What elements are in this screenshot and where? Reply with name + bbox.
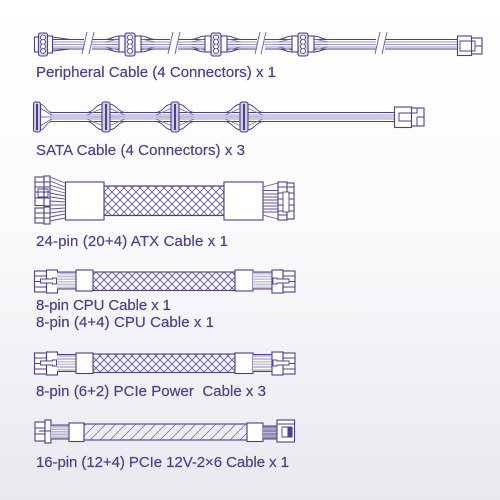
- cable: 8-pin CPU: [34, 270, 295, 293]
- cable: 24-pin ATX: [35, 176, 294, 224]
- label: 16-pin 12V-2x6: 16-pin (12+4) PCIe 12V-2×6 Cable x 1: [36, 454, 289, 471]
- cable: 8-pin PCIe: [34, 352, 295, 375]
- label: 8-pin CPU: 8-pin CPU Cable x 1: [36, 297, 171, 314]
- cable: 16-pin 12V-2x6: [35, 420, 294, 443]
- label: peripheral: Peripheral Cable (4 Connectors) x 1: [36, 64, 276, 81]
- label: 8-pin 4+4 CPU: 8-pin (4+4) CPU Cable x 1: [36, 314, 214, 331]
- label: SATA: SATA Cable (4 Connectors) x 3: [36, 142, 245, 159]
- label: 24-pin ATX: 24-pin (20+4) ATX Cable x 1: [36, 233, 228, 250]
- cable: SATA: [34, 102, 424, 132]
- cable: peripheral: [34, 32, 482, 56]
- label: 8-pin PCIe: 8-pin (6+2) PCIe Power Cable x 3: [36, 383, 266, 400]
